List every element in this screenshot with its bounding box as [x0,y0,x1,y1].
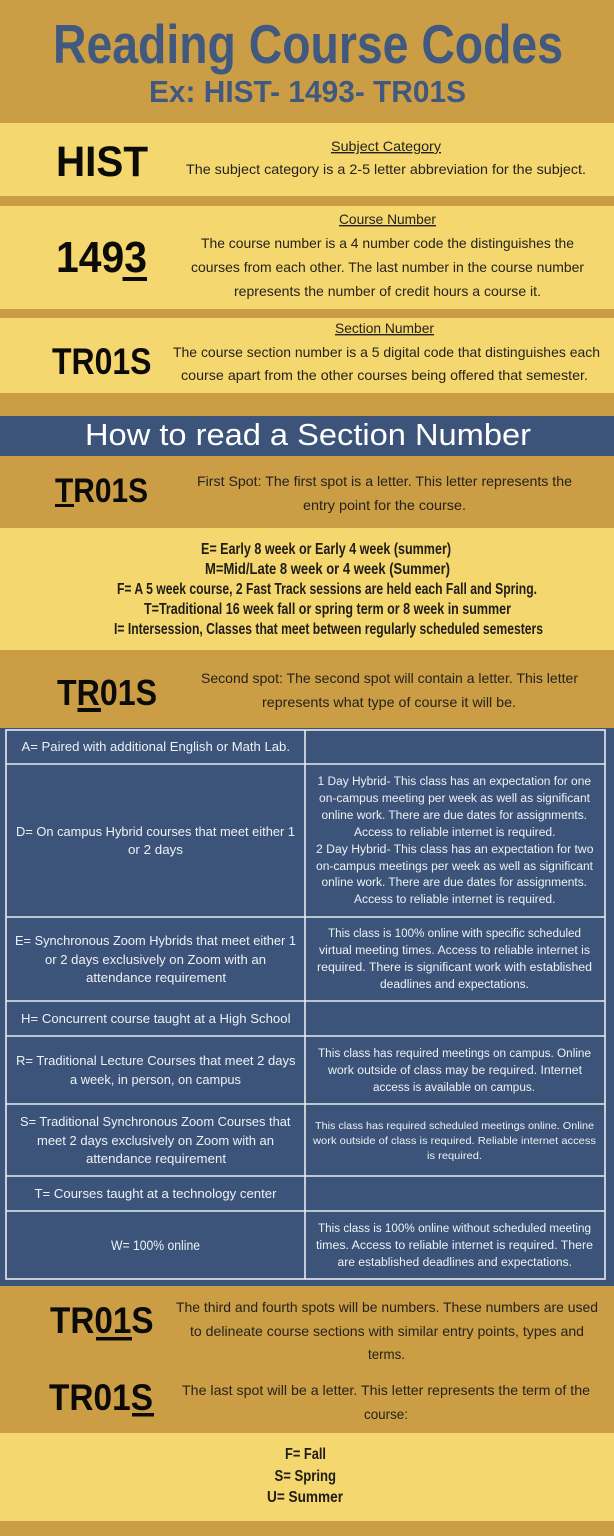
row E: required. There is significant work with established [317,962,592,974]
table: course types [0,728,614,1286]
heading: course number: Course Number [339,211,436,227]
row E: E= Synchronous Zoom Hybrids that meet either 1 [15,934,296,948]
row R: R= Traditional Lecture Courses that meet 2 days [16,1054,296,1068]
second spot row [57,670,578,713]
code: HIST: HIST [56,138,148,186]
row S: This class has required scheduled meetings online. Online [315,1120,594,1132]
row D: 2 Day Hybrid- This class has an expectation for two [316,844,594,856]
row D [16,776,594,906]
row W: times. Access to reliable internet is required. There [316,1240,593,1252]
row W: are established deadlines and expectations. [338,1257,572,1269]
row S [20,1115,596,1166]
text: third and fourth spot description [176,1299,598,1362]
first spot row [55,472,572,513]
row W: W= 100% online [111,1237,200,1253]
row A: A= Paired with additional English or Math Lab. [22,740,290,754]
text: section number description: course apart from the other courses being offered that semester. [181,367,588,383]
text: subject category description: The subject category is a 2-5 letter abbreviation for the subject. [186,161,586,177]
row D: online work. There are due dates for assignments. [322,810,587,822]
row S: meet 2 days exclusively on Zoom with an [37,1134,274,1148]
row E: or 2 days exclusively on Zoom with an [45,953,266,967]
row D: Access to reliable internet is required. [354,827,556,839]
panel: section number [0,318,614,393]
row S: attendance requirement [86,1152,227,1166]
code: TR01S with T underlined: TR01S [55,472,148,510]
panel: term list: S= Spring [274,1468,336,1485]
heading: section number: Section Number [335,320,434,336]
code: TR01S: TR01S [52,341,152,382]
text: second spot description [201,670,578,710]
text: course number description: The course number is a 4 number code the distinguishes the [201,235,574,251]
row T: T= Courses taught at a technology center [34,1187,276,1201]
row D: on-campus meeting per week as well as significant [319,793,591,805]
code: 1493 with last digit underlined: 1493 [56,233,147,282]
row H: H= Concurrent course taught at a High School [21,1012,290,1026]
banner: how to read a section number [0,416,614,456]
row D: Access to reliable internet is required. [354,894,556,906]
row R: a week, in person, on campus [70,1073,241,1087]
title block [53,13,563,109]
row D: on-campus meetings per week as well as significant [316,861,594,873]
row R [16,1048,591,1094]
text: section number description [173,344,600,383]
text: third and fourth spot description: to delineate course sections with similar entry points, types and [190,1323,584,1339]
row W [111,1223,593,1269]
panel: term list [0,1433,614,1521]
text: third and fourth spot description: The third and fourth spots will be numbers. These numbers are used [176,1299,598,1315]
row R: This class has required meetings on campus. Online [318,1048,591,1060]
row S: is required. [427,1150,482,1162]
code: TR01S with S underlined: TR01S [49,1377,153,1418]
text: last spot description [182,1382,590,1422]
panel: term list: U= Summer [267,1489,343,1506]
row E [15,928,592,991]
row W: This class is 100% online without scheduled meeting [318,1223,591,1235]
text: course number description [191,235,584,299]
row E: This class is 100% online with specific scheduled [328,928,581,940]
row E: virtual meeting times. Access to reliable internet is [319,945,590,957]
row E: deadlines and expectations. [380,979,529,991]
row D: online work. There are due dates for assignments. [322,877,587,889]
panel: entry point list: T=Traditional 16 week fall or spring term or 8 week in summer [144,601,511,618]
text: section number description: The course section number is a 5 digital code that distinguishes each [173,344,600,360]
panel: entry point list: M=Mid/Late 8 week or 4 week (Summer) [205,561,450,578]
text: third and fourth spot description: terms. [368,1346,405,1362]
panel: course number [0,206,614,309]
text: first spot description: First Spot: The first spot is a letter. This letter represents the [197,473,572,489]
row D: or 2 days [128,843,183,857]
code: TR01S with 01 underlined: TR01S [50,1300,154,1341]
text: first spot description [197,473,572,513]
row R: access is available on campus. [373,1082,535,1094]
third and fourth spot row [50,1299,598,1362]
banner: how to read a section number: How to read a Section Number [85,417,531,452]
panel: entry point list: E= Early 8 week or Early 4 week (summer) [201,541,451,558]
row D: D= On campus Hybrid courses that meet either 1 [16,825,295,839]
panel: subject category [0,123,614,196]
subtitle: example code: Ex: HIST- 1493- TR01S [149,74,466,109]
text: last spot description: The last spot will be a letter. This letter represents the term of the [182,1382,590,1398]
last spot row [49,1377,590,1422]
text: second spot description: Second spot: The second spot will contain a letter. This letter [201,670,578,686]
text: course number description: courses from each other. The last number in the course number [191,259,584,275]
row E: attendance requirement [86,971,227,985]
code: TR01S with R underlined: TR01S [57,672,157,713]
panel: entry point list [0,528,614,650]
row S: work outside of class is required. Reliable internet access [312,1135,596,1147]
text: first spot description: entry point for the course. [303,497,466,513]
text: last spot description: course: [364,1406,408,1422]
panel: term list: F= Fall [285,1446,326,1463]
row R: work outside of class may be required. Internet [327,1065,583,1077]
heading: subject category: Subject Category [331,138,441,154]
text: second spot description: represents what type of course it will be. [262,694,516,710]
row S: S= Traditional Synchronous Zoom Courses that [20,1115,291,1129]
text: course number description: represents the number of credit hours a course it. [234,283,541,299]
row D: 1 Day Hybrid- This class has an expectation for one [318,776,591,788]
